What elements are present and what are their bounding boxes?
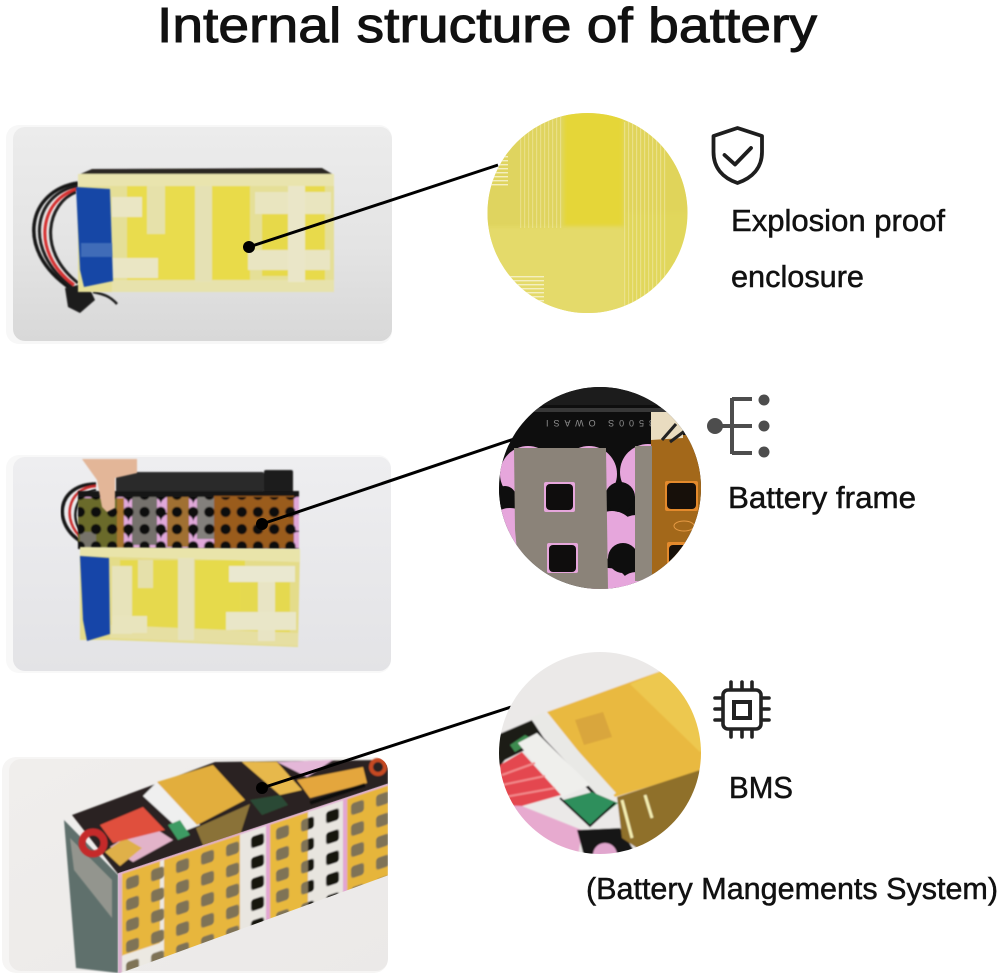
nickel strip xyxy=(514,448,608,592)
pack side wrap xyxy=(64,820,118,973)
cable and connector xyxy=(34,183,117,313)
zoom circle: BMS xyxy=(497,650,705,867)
red and black leads xyxy=(62,484,96,542)
panel: BMS pack photo xyxy=(2,757,388,974)
square cell openings xyxy=(544,481,698,573)
hand holding the pack xyxy=(82,459,137,512)
front face with strips xyxy=(118,783,388,974)
label: Explosion proof enclosure: Explosion proof xyxy=(731,203,945,238)
panel: enclosure photo xyxy=(6,125,392,344)
red wires xyxy=(500,752,561,808)
callout line: enclosure xyxy=(243,165,498,253)
pink cell xyxy=(514,804,582,852)
title: Internal structure of battery xyxy=(157,0,818,53)
gaps between cells xyxy=(494,482,638,573)
label: Battery frame: Battery frame xyxy=(728,480,916,515)
dark corner xyxy=(499,720,544,768)
black bar with printed label: 3500S OWASI xyxy=(546,418,654,428)
callout line: battery frame xyxy=(256,439,514,530)
black tape xyxy=(576,827,634,854)
orange film area xyxy=(651,435,701,576)
blue tape xyxy=(76,187,113,287)
gold foil xyxy=(617,770,702,850)
pack top with BMS xyxy=(72,760,388,874)
label: Battery Mangements System: (Battery Mangements System) xyxy=(586,871,998,906)
zoom circle: battery frame xyxy=(499,387,701,589)
yellow insulated BMS board xyxy=(547,670,705,797)
green PCB xyxy=(563,792,618,826)
icon: BMS chip xyxy=(715,682,769,737)
zoom circle: enclosure xyxy=(485,110,690,317)
lower yellow sleeve xyxy=(80,547,300,647)
battery pack top xyxy=(78,470,299,549)
white connector xyxy=(517,732,589,788)
white clamp xyxy=(532,720,617,796)
panel: battery frame photo xyxy=(6,455,391,673)
callout line: BMS xyxy=(256,707,511,794)
label: BMS: BMS xyxy=(729,770,793,805)
label: Explosion proof enclosure xyxy=(731,203,945,294)
label: Explosion proof enclosure: enclosure xyxy=(731,259,864,294)
pink cell rims xyxy=(500,444,651,589)
blue tape xyxy=(80,556,110,641)
battery wrapped in yellow tape xyxy=(78,168,334,292)
black bar with printed label xyxy=(534,387,666,426)
icon: frame tree xyxy=(707,394,770,458)
icon: shield with check xyxy=(714,128,762,183)
